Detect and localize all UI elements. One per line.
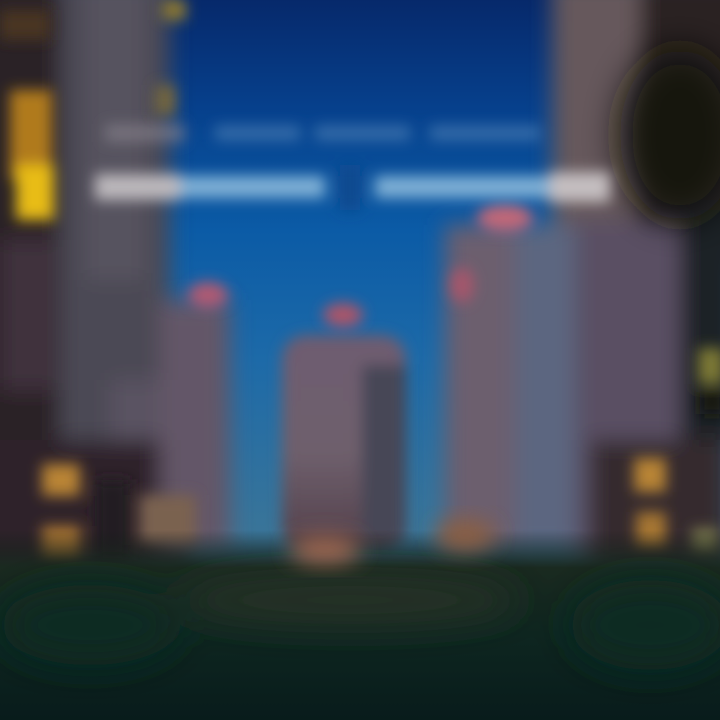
right lit windows <box>634 348 720 554</box>
left lit windows <box>0 0 196 562</box>
dark tree top right <box>620 50 720 220</box>
foliage ground <box>0 519 720 720</box>
title band: illegible blurred text <box>95 124 610 210</box>
right tower group <box>445 0 720 570</box>
center tower <box>282 335 406 550</box>
pink tower tops <box>188 204 533 327</box>
left tower group <box>0 0 230 580</box>
